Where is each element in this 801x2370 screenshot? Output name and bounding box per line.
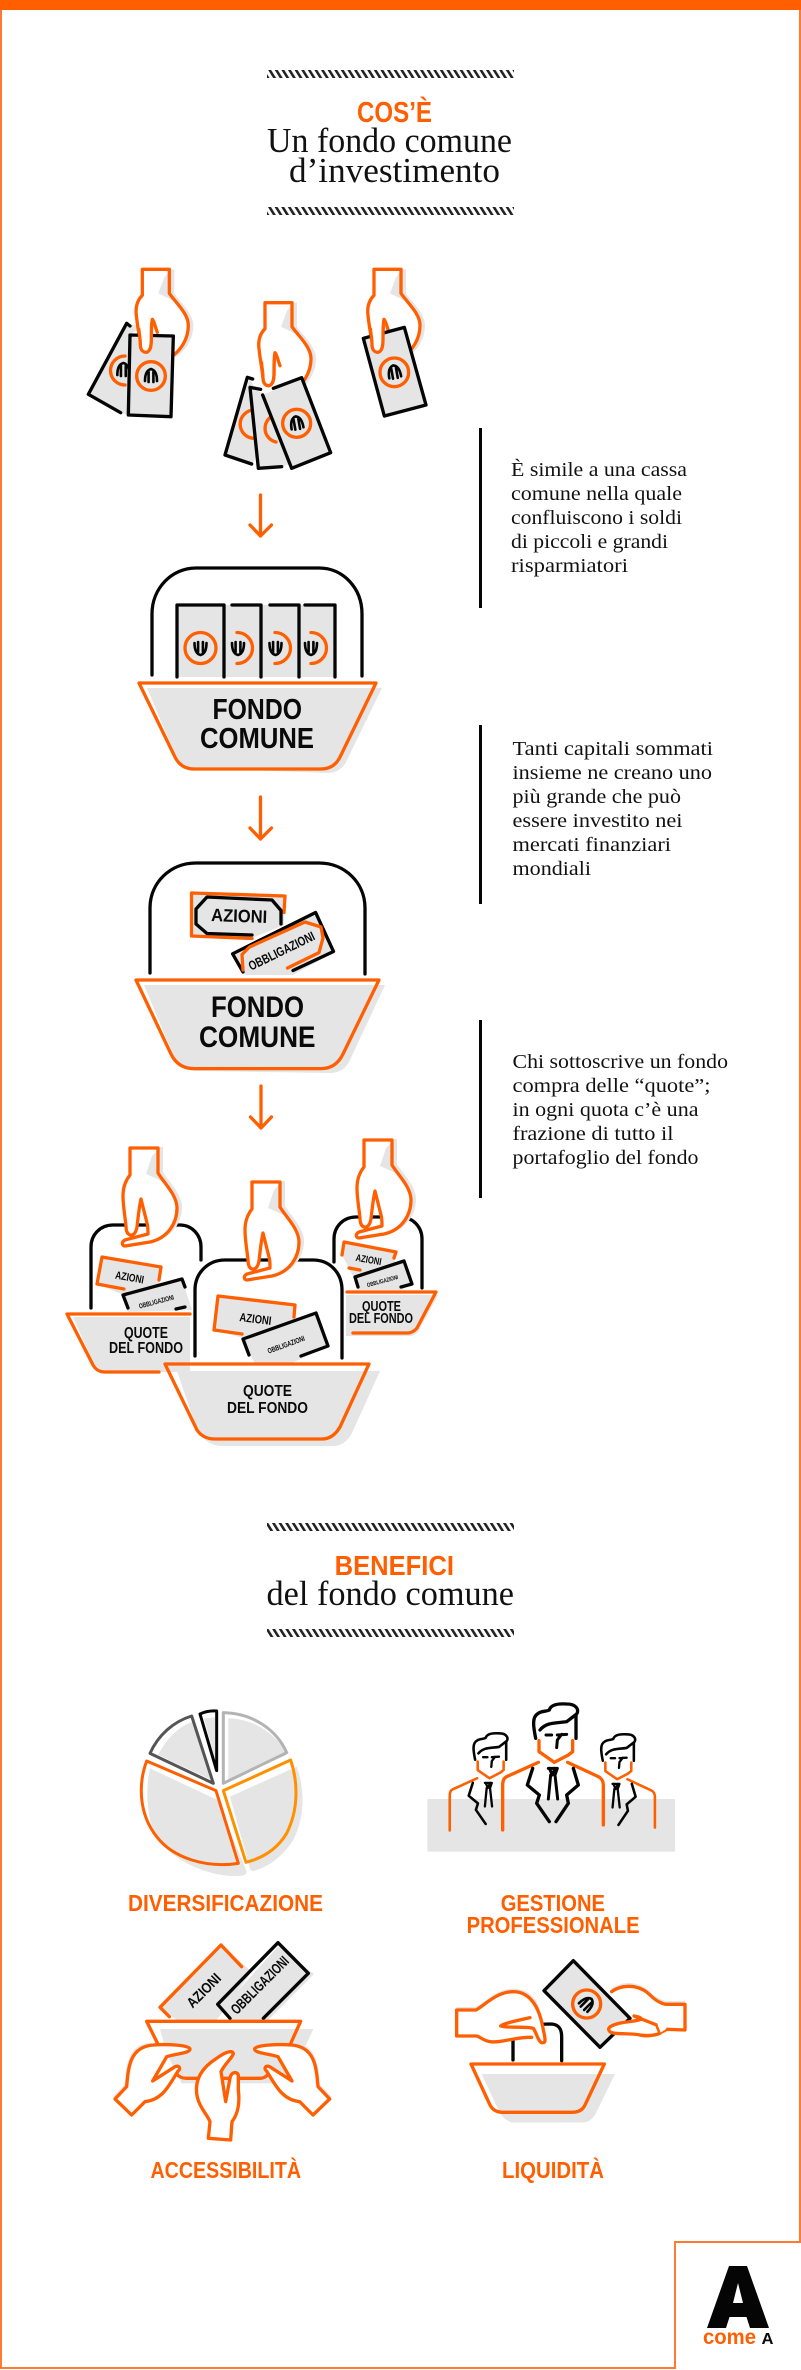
logo: come A <box>703 2266 774 2349</box>
right thumb <box>609 2016 660 2036</box>
text block 3: frazione di tutto il <box>512 1123 674 1145</box>
left manager <box>450 1733 507 1830</box>
bowl <box>160 2029 313 2083</box>
label: gestione professionale: GESTIONE <box>501 1890 605 1916</box>
left hand <box>113 2043 190 2115</box>
middle hand <box>196 2052 239 2140</box>
tag: azioni: AZIONI <box>239 1310 272 1328</box>
basket: fondo comune with money: COMUNE <box>200 723 314 755</box>
heading: cos'è <box>267 70 514 215</box>
arch <box>150 863 365 974</box>
label: liquidità: LIQUIDITÀ <box>502 2156 604 2183</box>
text block 2: mercati finanziari <box>512 834 671 856</box>
text block 1: risparmiatori <box>511 555 628 577</box>
tag: obbligazioni: OBBLIGAZIONI <box>138 1295 175 1311</box>
arch <box>513 2024 562 2061</box>
text block 1 <box>479 428 687 608</box>
right hand <box>255 2043 332 2115</box>
hand 1 with two notes <box>88 269 193 417</box>
hand <box>122 1147 182 1246</box>
tag: obbligazioni: OBBLIGAZIONI <box>367 1275 399 1289</box>
bowl <box>482 2074 615 2122</box>
arrow 2 <box>250 797 272 839</box>
text block 2: mondiali <box>512 858 591 880</box>
right quota basket: DEL FONDO <box>349 1311 413 1327</box>
heading: cos'è: Un fondo comune <box>267 121 512 160</box>
text block 2: essere investito nei <box>512 810 683 832</box>
basket: fondo comune with money: FONDO <box>212 694 302 726</box>
tag: obbligazioni: OBBLIGAZIONI <box>228 1954 293 2018</box>
label: diversificazione: DIVERSIFICAZIONE <box>128 1890 323 1916</box>
tag: azioni: AZIONI <box>184 1971 225 2012</box>
central manager <box>503 1704 603 1830</box>
text block 3: portafoglio del fondo <box>512 1147 698 1169</box>
left quota basket <box>67 1147 201 1372</box>
label: gestione professionale <box>467 1890 640 1938</box>
label: accessibilità: ACCESSIBILITÀ <box>150 2156 301 2183</box>
tag: azioni: AZIONI <box>355 1253 382 1268</box>
text block 3 <box>479 1020 728 1198</box>
hand <box>356 1139 416 1238</box>
arch <box>195 1260 342 1358</box>
icon: hands around bowl <box>113 1943 332 2140</box>
text block 1: comune nella quale <box>511 483 682 505</box>
tag: azioni <box>342 1242 396 1280</box>
icon: managers <box>427 1704 675 1852</box>
hand <box>244 1181 304 1280</box>
text block 1: È simile a una cassa <box>511 458 687 481</box>
heading: cos'è: COS’È <box>357 95 432 129</box>
central quota basket: QUOTE <box>243 1383 292 1400</box>
icon: hands exchanging bill over bowl <box>457 1961 685 2122</box>
logo: come A: A <box>762 2331 774 2348</box>
tag: azioni <box>214 1296 295 1340</box>
tag: azioni <box>97 1257 161 1295</box>
tag: azioni: AZIONI <box>114 1270 145 1286</box>
right manager <box>601 1734 655 1828</box>
top bar <box>0 0 801 10</box>
basket: fondo comune with securities <box>136 863 385 1073</box>
tag: obbligazioni <box>123 1279 192 1312</box>
icon: hands holding money <box>88 269 426 468</box>
tag: obbligazioni <box>243 1313 328 1364</box>
arrow 3 <box>250 1086 272 1128</box>
text block 2: insieme ne creano uno <box>512 762 712 784</box>
heading: cos'è: d’investimento <box>289 151 500 190</box>
heading: benefici: BENEFICI <box>335 1550 454 1581</box>
left hand <box>457 1989 545 2043</box>
arch <box>334 1217 422 1288</box>
bowl <box>73 1317 190 1372</box>
tag: azioni <box>192 893 285 938</box>
left quota basket: DEL FONDO <box>109 1340 183 1357</box>
bowl shadow <box>144 985 385 1073</box>
basket: fondo comune with money <box>139 568 382 773</box>
bowl <box>177 1371 380 1446</box>
text block 2 <box>479 725 713 904</box>
arch <box>91 1225 201 1308</box>
tag: obbligazioni <box>355 1261 412 1290</box>
basket: fondo comune with securities: FONDO <box>211 991 304 1024</box>
arrow 1 <box>250 495 272 536</box>
text block 2: Tanti capitali sommati <box>512 738 713 760</box>
heading: benefici <box>266 1523 514 1637</box>
central quota basket: DEL FONDO <box>227 1400 308 1417</box>
text block 1: di piccoli e grandi <box>511 531 668 553</box>
central quota basket <box>165 1181 380 1446</box>
tag: azioni: AZIONI <box>211 905 268 927</box>
bowl shadow <box>147 688 382 773</box>
text block 2: più grande che può <box>512 786 681 808</box>
notes in the basket <box>177 605 335 677</box>
heading: benefici: del fondo comune <box>266 1574 514 1613</box>
icon: pie chart <box>141 1711 303 1876</box>
logo: come A: come <box>703 2326 756 2349</box>
basket: fondo comune with securities: COMUNE <box>199 1021 316 1054</box>
hand 2 with three notes <box>225 303 331 468</box>
bowl <box>139 683 376 769</box>
tag: obbligazioni: OBBLIGAZIONI <box>246 928 317 973</box>
text block 3: compra delle “quote”; <box>512 1075 710 1097</box>
left quota basket: QUOTE <box>124 1325 168 1342</box>
text block 1: confluiscono i soldi <box>511 507 682 529</box>
text block 3: in ogni quota c’è una <box>512 1099 698 1121</box>
tag: azioni <box>160 1945 252 2020</box>
hand 3 with one note <box>363 269 426 416</box>
bill <box>544 1961 630 2047</box>
right hand back <box>612 1983 685 2036</box>
bowl <box>346 1295 438 1336</box>
tag: obbligazioni: OBBLIGAZIONI <box>266 1334 306 1356</box>
bowl <box>136 980 379 1069</box>
right quota basket <box>334 1139 438 1336</box>
right quota basket: QUOTE <box>362 1299 401 1315</box>
label: gestione professionale: PROFESSIONALE <box>467 1912 640 1938</box>
text block 3: Chi sottoscrive un fondo <box>512 1051 728 1073</box>
arch <box>152 568 362 676</box>
